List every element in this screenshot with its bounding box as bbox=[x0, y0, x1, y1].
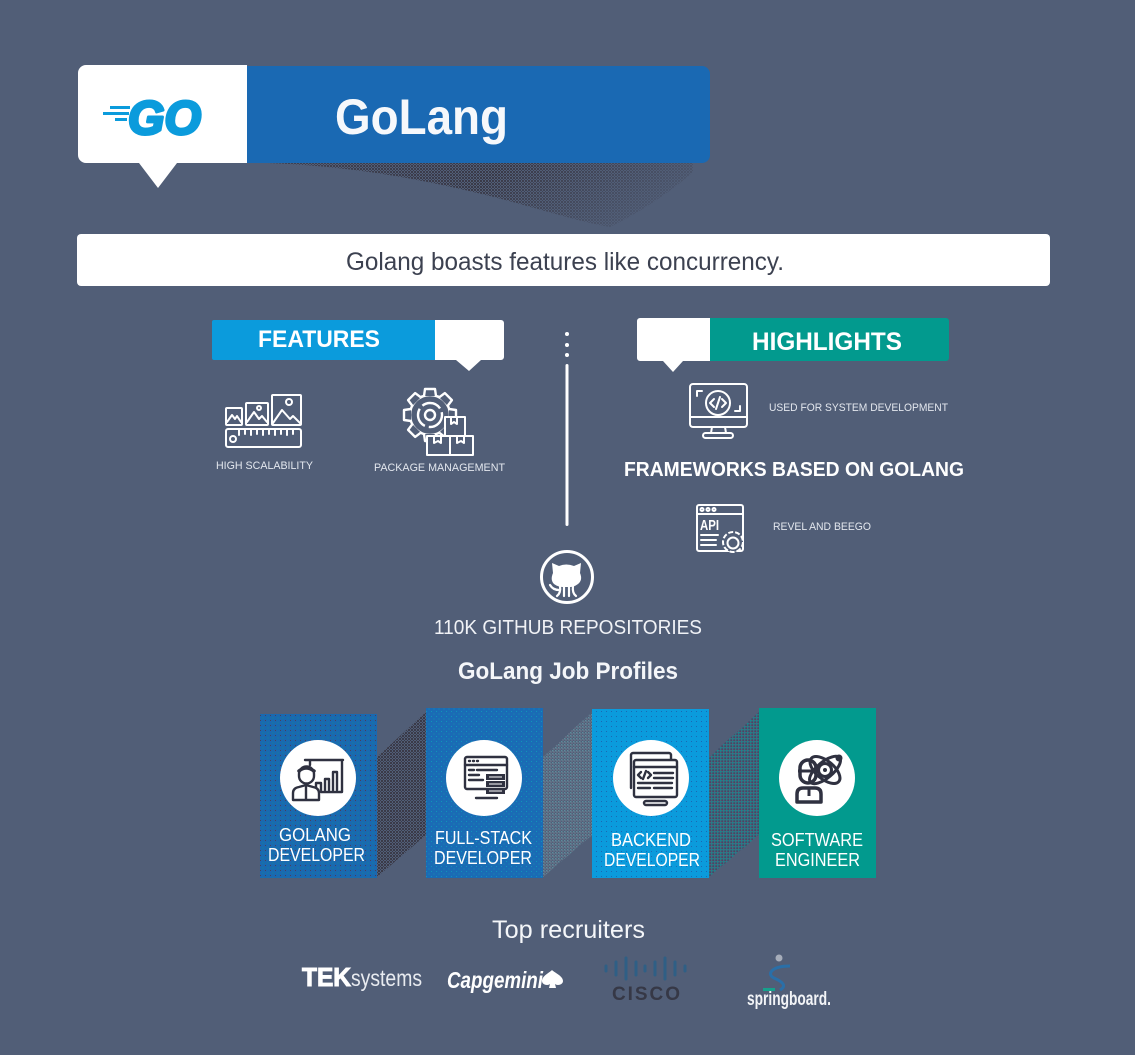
job profiles heading: GoLang Job Profiles bbox=[458, 658, 678, 685]
full-stack developer label: DEVELOPER bbox=[434, 848, 532, 868]
card: software engineer bbox=[759, 708, 876, 878]
backend developer label bbox=[604, 830, 700, 870]
github repositories text: 110K GITHUB REPOSITORIES bbox=[434, 617, 702, 639]
backend developer label: BACKEND bbox=[611, 830, 691, 850]
icon: monitor with code bbox=[690, 384, 747, 438]
header logo tab bbox=[78, 65, 247, 188]
card: full-stack developer bbox=[426, 708, 543, 878]
logo: springboard: springboard. bbox=[747, 989, 831, 1010]
header banner bbox=[78, 65, 710, 227]
icon: API settings window bbox=[697, 505, 743, 552]
software engineer label: SOFTWARE bbox=[771, 830, 863, 850]
highlights heading: HIGHLIGHTS bbox=[752, 328, 902, 356]
logo: springboard bbox=[747, 954, 831, 1010]
header title bar bbox=[247, 66, 710, 163]
revel and beego label: REVEL AND BEEGO bbox=[773, 521, 871, 533]
center divider bbox=[565, 332, 569, 526]
software engineer label bbox=[771, 830, 863, 870]
icon: engineer with atom bbox=[797, 752, 845, 802]
logo: TEKsystems: TEK bbox=[302, 962, 351, 992]
job profile connectors bbox=[377, 712, 759, 877]
features heading bbox=[212, 320, 504, 371]
title: GoLang bbox=[335, 89, 508, 145]
icon: API settings window: API bbox=[700, 517, 719, 534]
logo: Cisco bbox=[606, 958, 685, 1005]
features heading: FEATURES bbox=[258, 326, 380, 353]
icon: github bbox=[542, 552, 592, 602]
software engineer label: ENGINEER bbox=[775, 850, 860, 870]
logo: TEKsystems: systems bbox=[351, 965, 422, 991]
high scalability label: HIGH SCALABILITY bbox=[216, 460, 314, 472]
frameworks heading: FRAMEWORKS BASED ON GOLANG bbox=[624, 459, 964, 481]
package management label: PACKAGE MANAGEMENT bbox=[374, 462, 505, 474]
icon: package management bbox=[404, 389, 473, 455]
panel: highlights bbox=[624, 318, 964, 552]
full-stack developer label bbox=[434, 828, 532, 868]
recruiter logos bbox=[302, 954, 831, 1010]
backend developer label: DEVELOPER bbox=[604, 850, 700, 870]
golang developer label: DEVELOPER bbox=[268, 845, 365, 865]
highlights heading bbox=[637, 318, 949, 372]
logo: Capgemini: Capgemini bbox=[447, 967, 543, 993]
golang developer label: GOLANG bbox=[279, 825, 351, 845]
panel: features bbox=[212, 320, 505, 474]
header shadow bbox=[268, 163, 693, 227]
top recruiters heading: Top recruiters bbox=[492, 916, 645, 944]
card: backend developer bbox=[592, 709, 709, 878]
icon: code monitor with server bbox=[465, 757, 507, 798]
logo: Cisco: CISCO bbox=[612, 984, 680, 1005]
subtitle bar bbox=[77, 234, 1050, 286]
full-stack developer label: FULL-STACK bbox=[435, 828, 532, 848]
system development label: USED FOR SYSTEM DEVELOPMENT bbox=[769, 402, 948, 414]
card: golang developer bbox=[260, 714, 377, 878]
icon: backend code windows bbox=[631, 753, 677, 805]
icon: Go logo: GO bbox=[128, 91, 201, 144]
subtitle bar: Golang boasts features like concurrency. bbox=[346, 248, 784, 276]
golang developer label bbox=[268, 825, 365, 865]
logo: TEKsystems bbox=[302, 962, 422, 992]
icon: high scalability bbox=[226, 395, 301, 447]
icon: presenter with chart bbox=[293, 760, 343, 800]
